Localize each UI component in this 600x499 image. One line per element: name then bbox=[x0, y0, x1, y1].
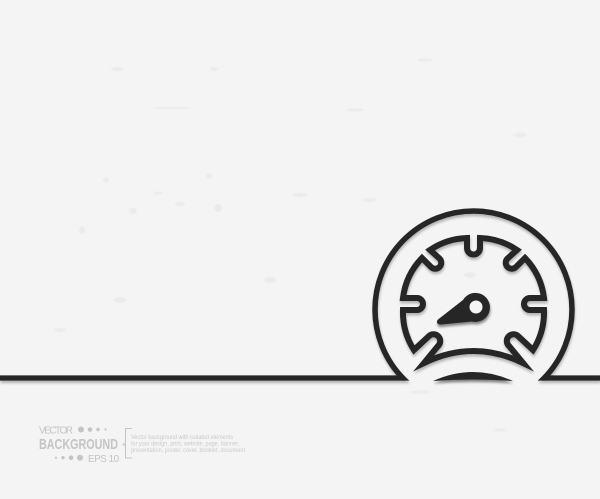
description: for your design, print, website, page, banner, bbox=[131, 442, 239, 448]
caption block bbox=[39, 426, 245, 465]
bracket bbox=[123, 428, 132, 458]
gauge shadow bbox=[0, 214, 600, 410]
description: Vector background with isolated elements bbox=[131, 435, 233, 441]
description bbox=[131, 435, 245, 454]
dots: upper bbox=[78, 426, 107, 432]
label: eps: EPS 10 bbox=[88, 454, 119, 465]
background texture bbox=[54, 58, 527, 432]
label: vector: VECTOR bbox=[39, 426, 73, 436]
dots: lower bbox=[55, 455, 83, 461]
icon: hub hole bbox=[470, 300, 482, 314]
speedometer icon with baseline bbox=[0, 211, 600, 408]
description: presentation, poster, cover, booklet, document bbox=[131, 448, 245, 454]
label: background: BACKGROUND bbox=[39, 436, 118, 453]
